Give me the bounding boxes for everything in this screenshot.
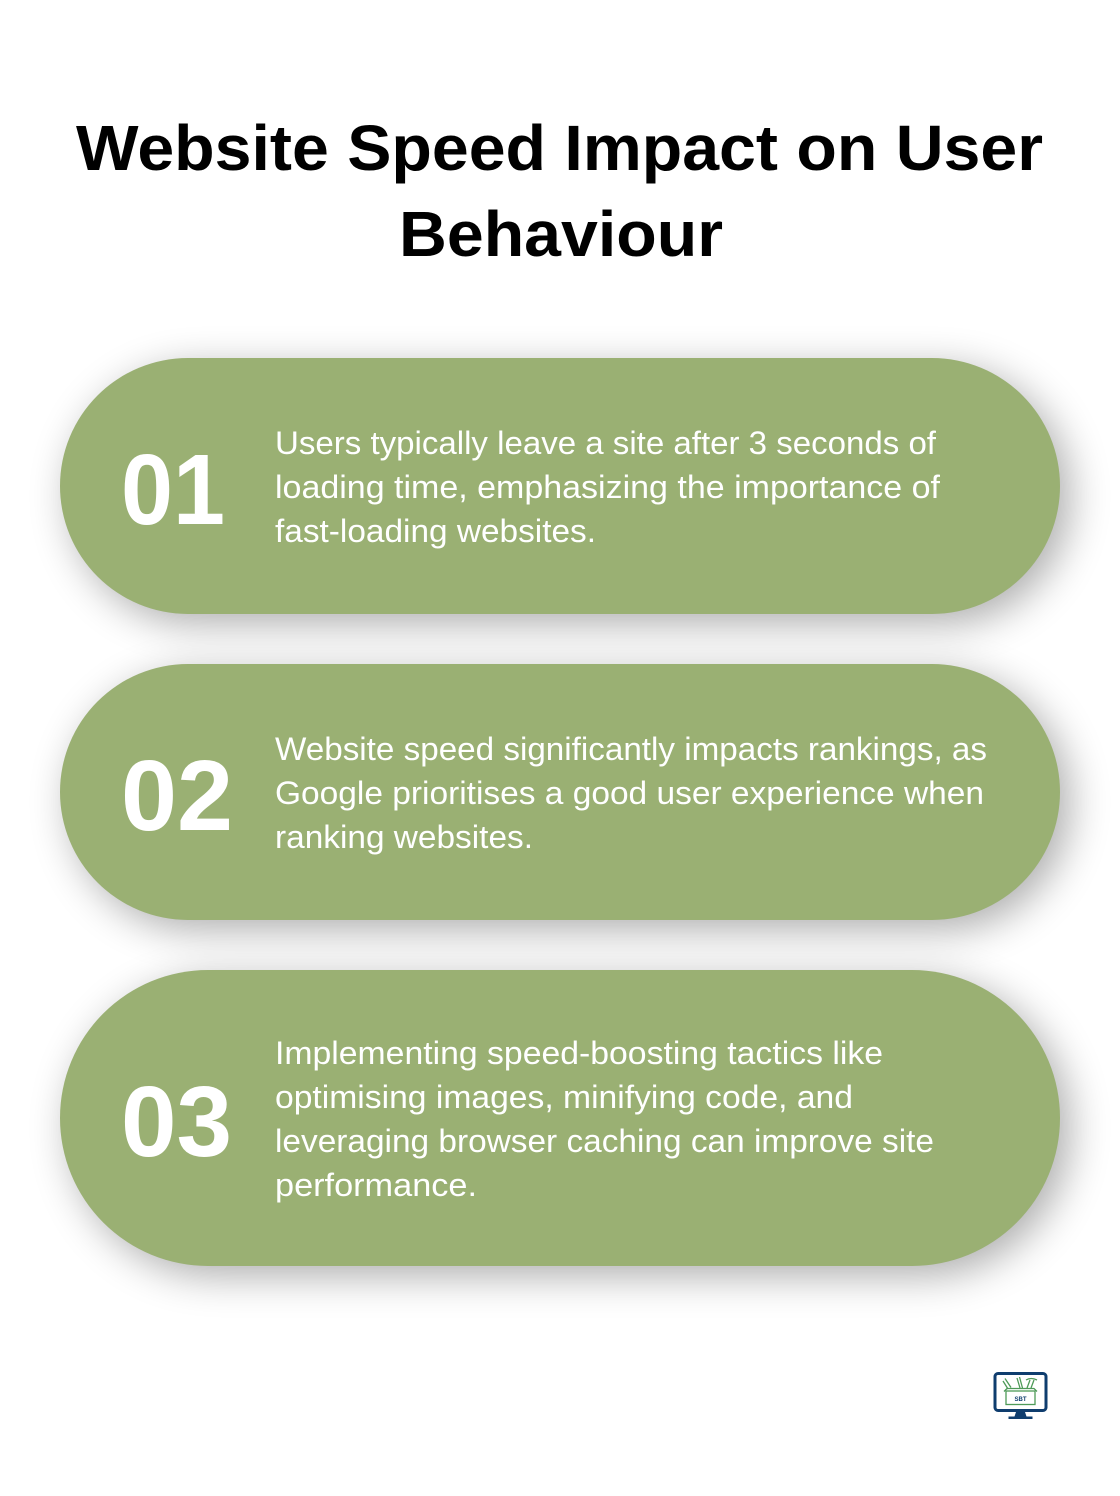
text block: card 2 (275, 731, 987, 855)
panel: card 2 background (60, 664, 1060, 920)
text block: card 2: Website speed significantly impacts rankings, as (275, 731, 987, 767)
text block: card 1: fast-loading websites. (275, 513, 596, 549)
title: Website Speed Impact on User (76, 112, 1043, 184)
text block: card 3: leveraging browser caching can improve site (275, 1123, 934, 1159)
icon: monitor with toolbox logo (995, 1374, 1046, 1419)
text block: card 3 (275, 1035, 934, 1203)
text block: card 1 (275, 425, 941, 549)
number 01: 01 (121, 434, 225, 546)
text block: card 3: optimising images, minifying code, and (275, 1079, 853, 1115)
text block: card 1: loading time, emphasizing the importance of (275, 469, 941, 505)
text block: card 2: Google prioritises a good user experience when (275, 775, 984, 811)
title (76, 112, 1043, 270)
text block: card 2: ranking websites. (275, 819, 533, 855)
panel: card 1 background (60, 358, 1060, 614)
text block: card 3: Implementing speed-boosting tactics like (275, 1035, 883, 1071)
text block: card 3: performance. (275, 1167, 477, 1203)
number 02: 02 (121, 740, 233, 852)
title: Behaviour (399, 198, 723, 270)
panel: card 3 background (60, 970, 1060, 1266)
icon: monitor with toolbox logo: SBT (1014, 1397, 1027, 1403)
number 03: 03 (121, 1066, 232, 1178)
text block: card 1: Users typically leave a site after 3 seconds of (275, 425, 937, 461)
